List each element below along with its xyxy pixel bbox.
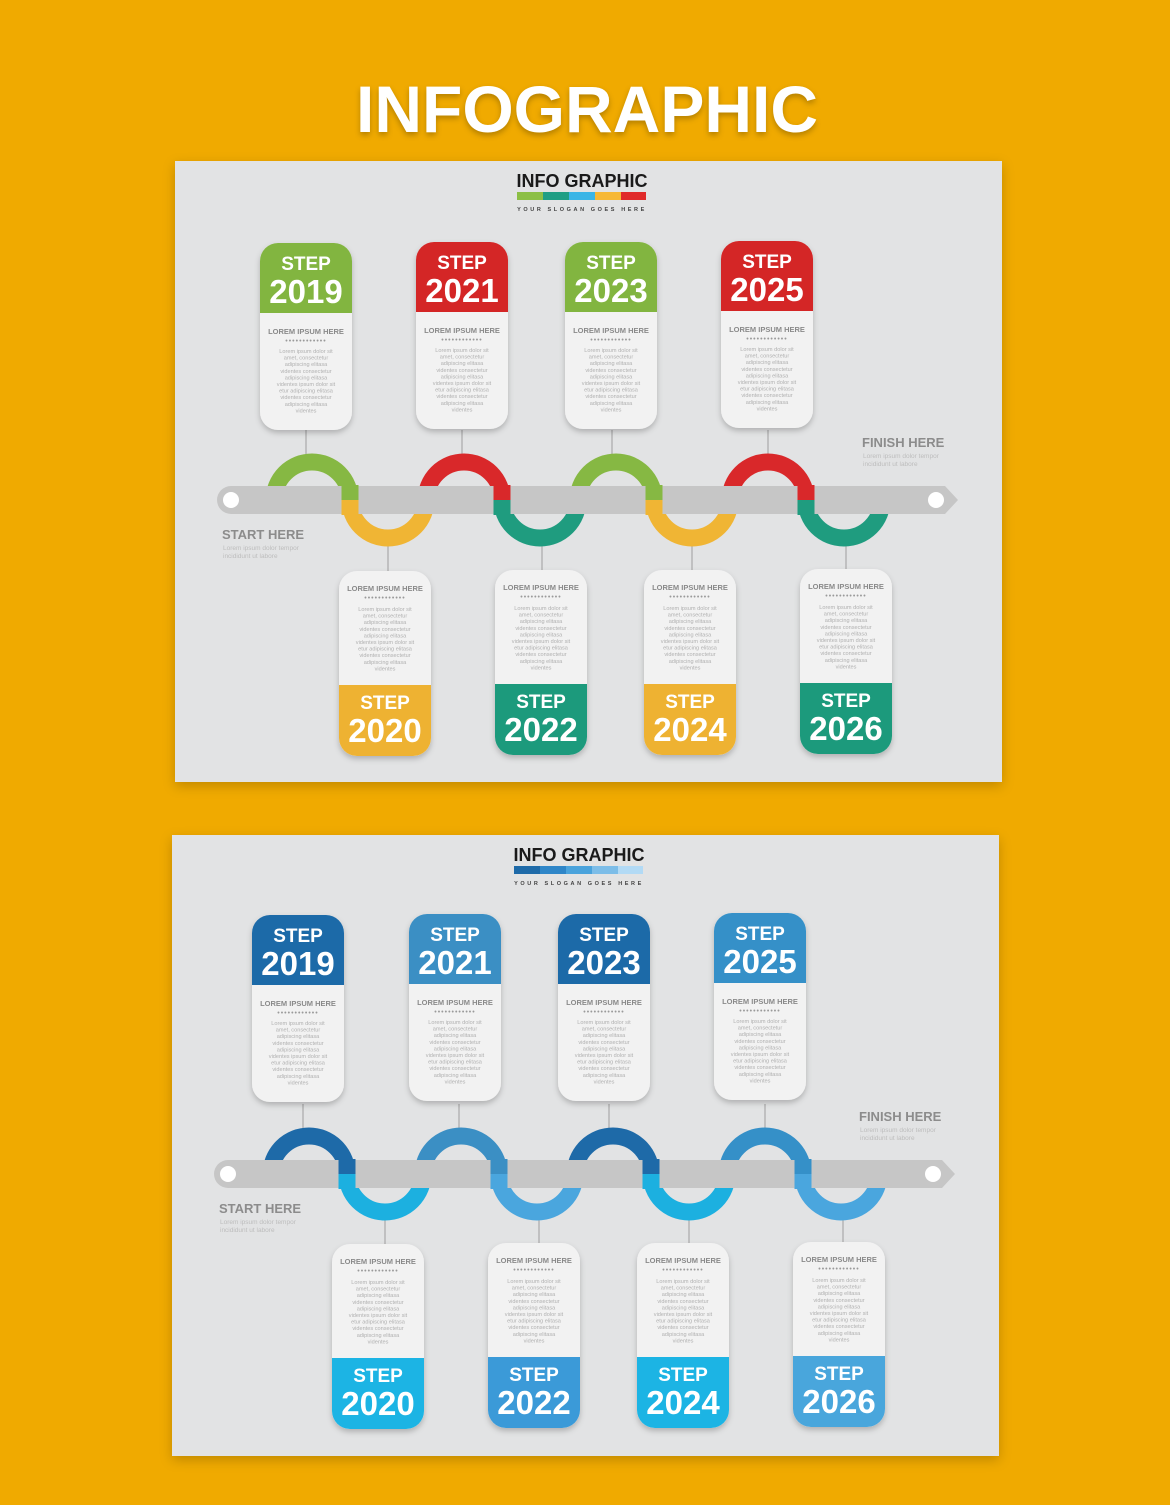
card: step 2025: adipiscing elitasa [746, 360, 789, 366]
card: step 2019: Lorem ipsum dolor sit [279, 349, 333, 355]
card: step 2020 [332, 1244, 424, 1429]
card: step 2026: etur adipiscing elitasa [819, 645, 874, 651]
card: step 2022: adipiscing elitasa [513, 1332, 556, 1338]
card: step 2022: amet, consectetur [512, 1286, 556, 1292]
card: step 2023: adipiscing elitasa [590, 401, 633, 407]
card: step 2020: STEP [353, 1366, 403, 1387]
card: step 2024: etur adipiscing elitasa [656, 1319, 711, 1325]
card: step 2025: videntes ipsum dolor sit [738, 380, 797, 386]
card: step 2026: amet, consectetur [817, 1285, 861, 1291]
card: step 2026: etur adipiscing elitasa [812, 1318, 867, 1324]
card: step 2020: 2020 [341, 1385, 415, 1422]
card: step 2025: Lorem ipsum dolor sit [740, 347, 794, 353]
card: step 2021: STEP [430, 925, 480, 946]
logo header: YOUR SLOGAN GOES HERE [514, 881, 644, 887]
card: step 2025: videntes consectetur [734, 1065, 786, 1071]
card: step 2024: amet, consectetur [668, 613, 712, 619]
card: step 2019: •••••••••••• [277, 1010, 319, 1017]
card: step 2026 [800, 569, 892, 754]
card: step 2021 [416, 242, 508, 429]
card: step 2021: etur adipiscing elitasa [428, 1060, 483, 1066]
card: step 2021: 2021 [425, 272, 499, 309]
card: step 2026: adipiscing elitasa [818, 1291, 861, 1297]
card: step 2025: adipiscing elitasa [739, 1032, 782, 1038]
card: step 2024: adipiscing elitasa [662, 1332, 705, 1338]
card: step 2020: amet, consectetur [363, 614, 407, 620]
card: step 2026: videntes [836, 664, 857, 670]
card: step 2025: videntes consectetur [741, 367, 793, 373]
card: step 2022: videntes [531, 665, 552, 671]
card: step 2026: adipiscing elitasa [825, 618, 868, 624]
card: step 2025: 2025 [723, 943, 797, 980]
card: step 2020: videntes [368, 1339, 389, 1345]
card: step 2023: adipiscing elitasa [583, 1046, 626, 1052]
card: step 2022: STEP [509, 1365, 559, 1386]
card: step 2023: LOREM IPSUM HERE [573, 326, 649, 335]
card: step 2022: videntes consectetur [508, 1325, 560, 1331]
card: step 2023: adipiscing elitasa [590, 374, 633, 380]
card: step 2024: videntes [673, 1338, 694, 1344]
card: step 2020: STEP [360, 693, 410, 714]
card: step 2026: adipiscing elitasa [825, 658, 868, 664]
card: step 2026: •••••••••••• [825, 593, 867, 600]
card: step 2019: videntes consectetur [272, 1041, 324, 1047]
card: step 2024: adipiscing elitasa [662, 1292, 705, 1298]
card: step 2020: videntes consectetur [352, 1300, 404, 1306]
card: step 2022: videntes consectetur [515, 626, 567, 632]
card: step 2021: videntes ipsum dolor sit [433, 381, 492, 387]
card: step 2025: •••••••••••• [746, 336, 788, 343]
card: step 2020: •••••••••••• [357, 1268, 399, 1275]
card: step 2026: Lorem ipsum dolor sit [819, 605, 873, 611]
card: step 2024: STEP [665, 692, 715, 713]
card: step 2020: adipiscing elitasa [357, 1293, 400, 1299]
card: step 2026: LOREM IPSUM HERE [808, 582, 884, 591]
card: step 2020: adipiscing elitasa [364, 620, 407, 626]
card: step 2020: •••••••••••• [364, 595, 406, 602]
card: step 2024: videntes ipsum dolor sit [654, 1312, 713, 1318]
finish label [862, 435, 945, 468]
card: step 2024: videntes consectetur [657, 1299, 709, 1305]
card: step 2019: amet, consectetur [276, 1028, 320, 1034]
card: step 2023: videntes consectetur [585, 394, 637, 400]
card: step 2019: videntes consectetur [272, 1067, 324, 1073]
card: step 2019: videntes ipsum dolor sit [269, 1054, 328, 1060]
card: step 2025: adipiscing elitasa [746, 400, 789, 406]
card: step 2021: amet, consectetur [440, 355, 484, 361]
card: step 2023: videntes consectetur [578, 1040, 630, 1046]
card: step 2022: adipiscing elitasa [513, 1292, 556, 1298]
connectors [303, 1104, 843, 1245]
card: step 2024: LOREM IPSUM HERE [652, 583, 728, 592]
card: step 2022: LOREM IPSUM HERE [503, 583, 579, 592]
finish label: FINISH HERE [862, 435, 945, 450]
card: step 2023: videntes [594, 1079, 615, 1085]
card: step 2024: amet, consectetur [661, 1286, 705, 1292]
card: step 2021: 2021 [418, 944, 492, 981]
card: step 2021: videntes consectetur [436, 394, 488, 400]
card: step 2024 [637, 1243, 729, 1428]
card: step 2020: 2020 [348, 712, 422, 749]
card: step 2024: adipiscing elitasa [662, 1305, 705, 1311]
card: step 2019: adipiscing elitasa [277, 1047, 320, 1053]
card: step 2020: Lorem ipsum dolor sit [358, 607, 412, 613]
card: step 2020: adipiscing elitasa [357, 1306, 400, 1312]
start label: Lorem ipsum dolor tempor [220, 1219, 297, 1226]
card: step 2022: adipiscing elitasa [520, 619, 563, 625]
card: step 2023: amet, consectetur [582, 1027, 626, 1033]
card: step 2025: videntes [750, 1078, 771, 1084]
card: step 2023: Lorem ipsum dolor sit [577, 1020, 631, 1026]
card: step 2019: 2019 [269, 273, 343, 310]
card: step 2025: adipiscing elitasa [746, 373, 789, 379]
card: step 2022: videntes [524, 1338, 545, 1344]
card: step 2019: videntes consectetur [280, 395, 332, 401]
card: step 2021: Lorem ipsum dolor sit [428, 1020, 482, 1026]
card: step 2022: •••••••••••• [513, 1267, 555, 1274]
card: step 2025: STEP [742, 252, 792, 273]
card: step 2025: STEP [735, 924, 785, 945]
card: step 2019: LOREM IPSUM HERE [260, 999, 336, 1008]
card: step 2020: adipiscing elitasa [357, 1333, 400, 1339]
card: step 2019: adipiscing elitasa [285, 362, 328, 368]
card: step 2019: LOREM IPSUM HERE [268, 327, 344, 336]
card: step 2024: videntes consectetur [657, 1325, 709, 1331]
card: step 2019: STEP [281, 254, 331, 275]
card: step 2019: adipiscing elitasa [277, 1074, 320, 1080]
card: step 2020: etur adipiscing elitasa [358, 647, 413, 653]
card: step 2021: videntes consectetur [436, 368, 488, 374]
card: step 2025: LOREM IPSUM HERE [722, 997, 798, 1006]
card: step 2022 [488, 1243, 580, 1428]
finish label: Lorem ipsum dolor tempor [860, 1127, 937, 1134]
card: step 2026: •••••••••••• [818, 1266, 860, 1273]
card: step 2026 [793, 1242, 885, 1427]
card: step 2023: 2023 [567, 944, 641, 981]
card: step 2020: LOREM IPSUM HERE [347, 584, 423, 593]
card: step 2021: videntes [445, 1079, 466, 1085]
card: step 2021: adipiscing elitasa [441, 374, 484, 380]
start label: incididunt ut labore [223, 553, 278, 560]
card: step 2026: videntes consectetur [820, 625, 872, 631]
card: step 2026: LOREM IPSUM HERE [801, 1255, 877, 1264]
card: step 2021: videntes [452, 407, 473, 413]
card: step 2020: videntes [375, 666, 396, 672]
start label [219, 1201, 301, 1234]
card: step 2026: videntes consectetur [813, 1324, 865, 1330]
finish label: incididunt ut labore [860, 1135, 915, 1142]
card: step 2025: etur adipiscing elitasa [740, 387, 795, 393]
card: step 2022: STEP [516, 692, 566, 713]
card: step 2022: Lorem ipsum dolor sit [507, 1279, 561, 1285]
card: step 2019: adipiscing elitasa [285, 375, 328, 381]
card: step 2024: 2024 [653, 711, 727, 748]
card: step 2024: •••••••••••• [662, 1267, 704, 1274]
card: step 2022: videntes ipsum dolor sit [505, 1312, 564, 1318]
card: step 2025: videntes consectetur [734, 1039, 786, 1045]
card: step 2021: adipiscing elitasa [434, 1033, 477, 1039]
card: step 2023: •••••••••••• [590, 337, 632, 344]
card: step 2022: •••••••••••• [520, 594, 562, 601]
card: step 2023: adipiscing elitasa [590, 361, 633, 367]
card: step 2024: Lorem ipsum dolor sit [656, 1279, 710, 1285]
logo header [513, 845, 645, 887]
card: step 2026: adipiscing elitasa [818, 1304, 861, 1310]
card: step 2020: Lorem ipsum dolor sit [351, 1280, 405, 1286]
card: step 2024: videntes consectetur [664, 652, 716, 658]
card: step 2021: •••••••••••• [441, 337, 483, 344]
card: step 2024: videntes consectetur [664, 626, 716, 632]
card: step 2025: •••••••••••• [739, 1008, 781, 1015]
card: step 2021: LOREM IPSUM HERE [417, 998, 493, 1007]
start label: Lorem ipsum dolor tempor [223, 545, 300, 552]
card: step 2023: adipiscing elitasa [583, 1033, 626, 1039]
card: step 2026: videntes consectetur [820, 651, 872, 657]
card: step 2026: amet, consectetur [824, 612, 868, 618]
card: step 2023: STEP [586, 253, 636, 274]
card: step 2025 [714, 913, 806, 1100]
card: step 2026: videntes ipsum dolor sit [810, 1311, 869, 1317]
card: step 2021: videntes ipsum dolor sit [426, 1053, 485, 1059]
start label: START HERE [222, 527, 304, 542]
card: step 2025: amet, consectetur [738, 1026, 782, 1032]
card: step 2023: adipiscing elitasa [583, 1073, 626, 1079]
card: step 2020: adipiscing elitasa [364, 660, 407, 666]
card: step 2024: 2024 [646, 1384, 720, 1421]
card: step 2020: videntes consectetur [359, 627, 411, 633]
card: step 2025: videntes consectetur [741, 393, 793, 399]
card: step 2023: STEP [579, 925, 629, 946]
card: step 2019: adipiscing elitasa [285, 402, 328, 408]
card: step 2024: videntes ipsum dolor sit [661, 639, 720, 645]
card: step 2022: LOREM IPSUM HERE [496, 1256, 572, 1265]
card: step 2023 [565, 242, 657, 429]
start label: incididunt ut labore [220, 1227, 275, 1234]
card: step 2023: 2023 [574, 272, 648, 309]
card: step 2023: amet, consectetur [589, 355, 633, 361]
card: step 2021: videntes consectetur [429, 1066, 481, 1072]
logo header: INFO GRAPHIC [513, 845, 645, 865]
card: step 2019: •••••••••••• [285, 338, 327, 345]
card: step 2019: amet, consectetur [284, 356, 328, 362]
card: step 2026: 2026 [809, 710, 883, 747]
card: step 2026: videntes ipsum dolor sit [817, 638, 876, 644]
card: step 2025: etur adipiscing elitasa [733, 1059, 788, 1065]
card: step 2019: etur adipiscing elitasa [279, 389, 334, 395]
card: step 2019: adipiscing elitasa [277, 1034, 320, 1040]
card: step 2025: videntes ipsum dolor sit [731, 1052, 790, 1058]
panel: blue timeline [172, 835, 999, 1456]
card: step 2026: STEP [814, 1364, 864, 1385]
card: step 2022: adipiscing elitasa [513, 1305, 556, 1311]
card: step 2024: adipiscing elitasa [669, 632, 712, 638]
card: step 2025 [721, 241, 813, 428]
connectors [306, 430, 846, 571]
card: step 2023 [558, 914, 650, 1101]
card: step 2020 [339, 571, 431, 756]
card: step 2023: videntes [601, 407, 622, 413]
card: step 2025: LOREM IPSUM HERE [729, 325, 805, 334]
start label [222, 527, 304, 560]
card: step 2022: adipiscing elitasa [520, 659, 563, 665]
logo header: INFO GRAPHIC [516, 171, 648, 191]
card: step 2023: LOREM IPSUM HERE [566, 998, 642, 1007]
card: step 2023: etur adipiscing elitasa [584, 388, 639, 394]
card: step 2022: Lorem ipsum dolor sit [514, 606, 568, 612]
card: step 2026: Lorem ipsum dolor sit [812, 1278, 866, 1284]
card: step 2020: amet, consectetur [356, 1287, 400, 1293]
finish label: incididunt ut labore [863, 461, 918, 468]
card: step 2026: 2026 [802, 1383, 876, 1420]
card: step 2022: adipiscing elitasa [520, 632, 563, 638]
card: step 2023: etur adipiscing elitasa [577, 1060, 632, 1066]
card: step 2022: etur adipiscing elitasa [514, 646, 569, 652]
card: step 2023: videntes ipsum dolor sit [575, 1053, 634, 1059]
card: step 2021: amet, consectetur [433, 1027, 477, 1033]
card: step 2025: adipiscing elitasa [739, 1045, 782, 1051]
card: step 2022: videntes ipsum dolor sit [512, 639, 571, 645]
card: step 2020: videntes ipsum dolor sit [349, 1313, 408, 1319]
card: step 2020: LOREM IPSUM HERE [340, 1257, 416, 1266]
card: step 2019: videntes ipsum dolor sit [277, 382, 336, 388]
card: step 2025: adipiscing elitasa [739, 1072, 782, 1078]
title: INFOGRAPHIC [356, 72, 818, 146]
finish label: FINISH HERE [859, 1109, 942, 1124]
card: step 2026: videntes consectetur [813, 1298, 865, 1304]
snake timeline [217, 462, 958, 538]
card: step 2021: LOREM IPSUM HERE [424, 326, 500, 335]
card: step 2019: videntes [288, 1080, 309, 1086]
card: step 2020: videntes consectetur [352, 1326, 404, 1332]
bar [217, 486, 958, 514]
card: step 2026: adipiscing elitasa [825, 631, 868, 637]
card: step 2020: etur adipiscing elitasa [351, 1320, 406, 1326]
card: step 2022: etur adipiscing elitasa [507, 1319, 562, 1325]
card: step 2020: adipiscing elitasa [364, 633, 407, 639]
card: step 2022: videntes consectetur [515, 652, 567, 658]
card: step 2023: videntes ipsum dolor sit [582, 381, 641, 387]
finish label: Lorem ipsum dolor tempor [863, 453, 940, 460]
card: step 2024: •••••••••••• [669, 594, 711, 601]
card: step 2024 [644, 570, 736, 755]
card: step 2026: videntes [829, 1337, 850, 1343]
card: step 2024: Lorem ipsum dolor sit [663, 606, 717, 612]
card: step 2025: Lorem ipsum dolor sit [733, 1019, 787, 1025]
snake timeline [214, 1136, 955, 1212]
card: step 2022 [495, 570, 587, 755]
card: step 2025: 2025 [730, 271, 804, 308]
card: step 2025: videntes [757, 406, 778, 412]
card: step 2020: videntes ipsum dolor sit [356, 640, 415, 646]
card: step 2022: 2022 [504, 711, 578, 748]
card: step 2025: amet, consectetur [745, 354, 789, 360]
card: step 2026: STEP [821, 691, 871, 712]
logo header [516, 171, 648, 213]
card: step 2024: videntes [680, 665, 701, 671]
card: step 2021: •••••••••••• [434, 1009, 476, 1016]
card: step 2021: Lorem ipsum dolor sit [435, 348, 489, 354]
card: step 2019: STEP [273, 926, 323, 947]
card: step 2022: videntes consectetur [508, 1299, 560, 1305]
card: step 2024: adipiscing elitasa [669, 659, 712, 665]
card: step 2021: videntes consectetur [429, 1040, 481, 1046]
card: step 2023: videntes consectetur [578, 1066, 630, 1072]
card: step 2021: adipiscing elitasa [441, 401, 484, 407]
card: step 2020: videntes consectetur [359, 653, 411, 659]
card: step 2024: LOREM IPSUM HERE [645, 1256, 721, 1265]
card: step 2023: •••••••••••• [583, 1009, 625, 1016]
card: step 2019: Lorem ipsum dolor sit [271, 1021, 325, 1027]
card: step 2023: videntes consectetur [585, 368, 637, 374]
finish label [859, 1109, 942, 1142]
card: step 2019 [260, 243, 352, 430]
card: step 2019: videntes consectetur [280, 369, 332, 375]
card: step 2021: adipiscing elitasa [441, 361, 484, 367]
card: step 2021: adipiscing elitasa [434, 1073, 477, 1079]
card: step 2022: amet, consectetur [519, 613, 563, 619]
logo header: YOUR SLOGAN GOES HERE [517, 207, 647, 213]
card: step 2019: 2019 [261, 945, 335, 982]
card: step 2019: etur adipiscing elitasa [271, 1061, 326, 1067]
card: step 2019 [252, 915, 344, 1102]
card: step 2021 [409, 914, 501, 1101]
card: step 2022: 2022 [497, 1384, 571, 1421]
card: step 2021: STEP [437, 253, 487, 274]
card: step 2023: Lorem ipsum dolor sit [584, 348, 638, 354]
card: step 2026: adipiscing elitasa [818, 1331, 861, 1337]
bar [214, 1160, 955, 1188]
card: step 2024: etur adipiscing elitasa [663, 646, 718, 652]
card: step 2021: etur adipiscing elitasa [435, 388, 490, 394]
card: step 2019: videntes [296, 408, 317, 414]
card: step 2024: adipiscing elitasa [669, 619, 712, 625]
start label: START HERE [219, 1201, 301, 1216]
card: step 2021: adipiscing elitasa [434, 1046, 477, 1052]
panel: colorful timeline [175, 161, 1002, 782]
card: step 2024: STEP [658, 1365, 708, 1386]
